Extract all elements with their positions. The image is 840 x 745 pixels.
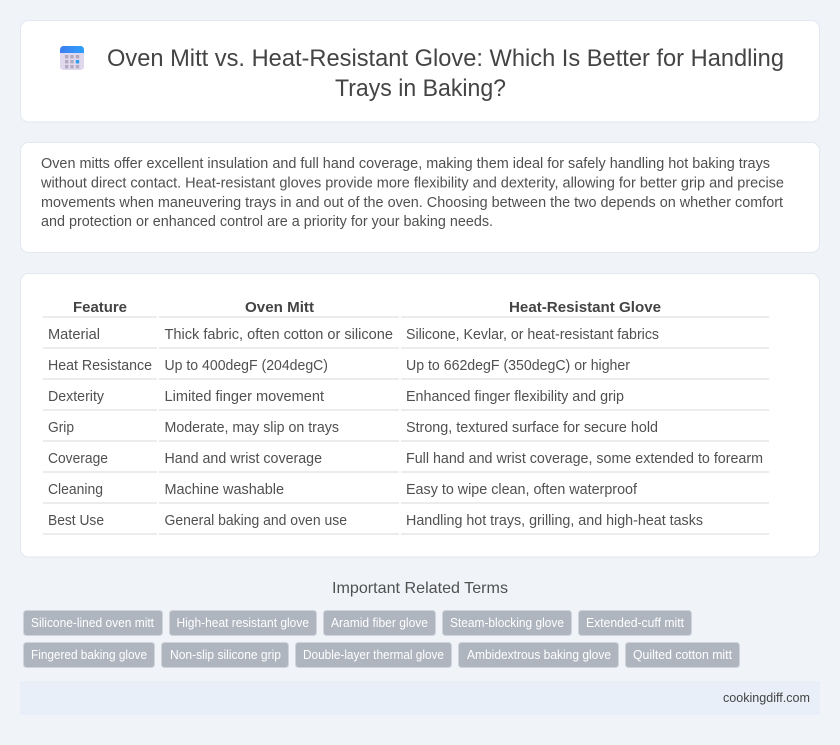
footer site name: cookingdiff.com xyxy=(723,690,810,705)
row: dexterity: Enhanced finger flexibility and grip xyxy=(406,389,624,405)
title: Trays in Baking? xyxy=(335,75,506,102)
row: dexterity xyxy=(43,389,769,410)
tag xyxy=(296,642,452,668)
title xyxy=(107,45,784,102)
heading: important related terms: Important Related Terms xyxy=(332,580,508,597)
row: heat resistance: Up to 400degF (204degC) xyxy=(164,358,328,374)
tag xyxy=(324,610,436,636)
tag: Non-slip silicone grip xyxy=(170,647,281,662)
row: heat resistance xyxy=(43,358,769,379)
row: cleaning xyxy=(43,482,769,503)
table header row: Heat-Resistant Glove xyxy=(509,299,661,316)
intro paragraph: without direct contact. Heat-resistant gloves provide more flexibility and dexterity, allowing for better grip and precise xyxy=(40,176,784,192)
intro paragraph xyxy=(40,156,784,230)
table header row: Feature xyxy=(73,299,127,316)
row: coverage xyxy=(43,451,769,472)
row: cleaning: Easy to wipe clean, often waterproof xyxy=(406,482,638,498)
icon: calendar xyxy=(60,46,84,70)
tag: High-heat resistant glove xyxy=(176,615,309,630)
row: grip: Moderate, may slip on trays xyxy=(164,420,339,436)
tag xyxy=(162,642,288,668)
row: heat resistance: Heat Resistance xyxy=(48,358,152,374)
table header row: Oven Mitt xyxy=(245,299,314,316)
row: grip: Strong, textured surface for secure hold xyxy=(406,420,658,436)
intro paragraph: Oven mitts offer excellent insulation and full hand coverage, making them ideal for safely handling hot baking trays xyxy=(41,156,770,172)
tag: Quilted cotton mitt xyxy=(633,647,732,662)
row: best use xyxy=(43,513,769,534)
row: material: Silicone, Kevlar, or heat-resistant fabrics xyxy=(406,327,659,343)
row: material: Thick fabric, often cotton or silicone xyxy=(164,327,393,343)
title: Oven Mitt vs. Heat-Resistant Glove: Which Is Better for Handling xyxy=(107,45,784,72)
header panel xyxy=(20,20,820,122)
tag xyxy=(24,642,154,668)
related term tags xyxy=(24,610,740,668)
tag: Double-layer thermal glove xyxy=(303,647,444,662)
row: coverage: Full hand and wrist coverage, some extended to forearm xyxy=(406,451,763,467)
tag xyxy=(170,610,316,636)
intro paragraph: movements when maneuvering trays in and out of the oven. Choosing between the two depends on whether comfort xyxy=(41,195,783,211)
tag: Silicone-lined oven mitt xyxy=(31,615,154,630)
row: grip: Grip xyxy=(48,420,74,436)
tag: Extended-cuff mitt xyxy=(586,615,684,630)
row: cleaning: Machine washable xyxy=(164,482,284,498)
tag: Aramid fiber glove xyxy=(331,615,428,630)
tag xyxy=(578,610,692,636)
tag: Fingered baking glove xyxy=(31,647,147,662)
row: material xyxy=(43,327,769,348)
footer bar xyxy=(20,681,820,715)
tag xyxy=(626,642,740,668)
row: cleaning: Cleaning xyxy=(48,482,103,498)
tag xyxy=(442,610,572,636)
row: material: Material xyxy=(48,327,100,343)
row: coverage: Coverage xyxy=(48,451,108,467)
panel: comparison table xyxy=(20,274,820,557)
row: best use: General baking and oven use xyxy=(164,513,347,529)
row: dexterity: Limited finger movement xyxy=(164,389,324,405)
row: coverage: Hand and wrist coverage xyxy=(164,451,322,467)
row: grip xyxy=(43,420,769,441)
row: best use: Handling hot trays, grilling, and high-heat tasks xyxy=(406,513,703,529)
tag: Steam-blocking glove xyxy=(450,615,564,630)
tag: Ambidextrous baking glove xyxy=(467,647,611,662)
tag xyxy=(24,610,162,636)
row: dexterity: Dexterity xyxy=(48,389,105,405)
intro paragraph: and protection or enhanced control are a priority for your baking needs. xyxy=(41,214,493,230)
row: heat resistance: Up to 662degF (350degC) or higher xyxy=(406,358,630,374)
row: best use: Best Use xyxy=(48,513,104,529)
tag xyxy=(458,642,618,668)
panel: introduction xyxy=(20,142,820,252)
table header row xyxy=(43,299,769,317)
